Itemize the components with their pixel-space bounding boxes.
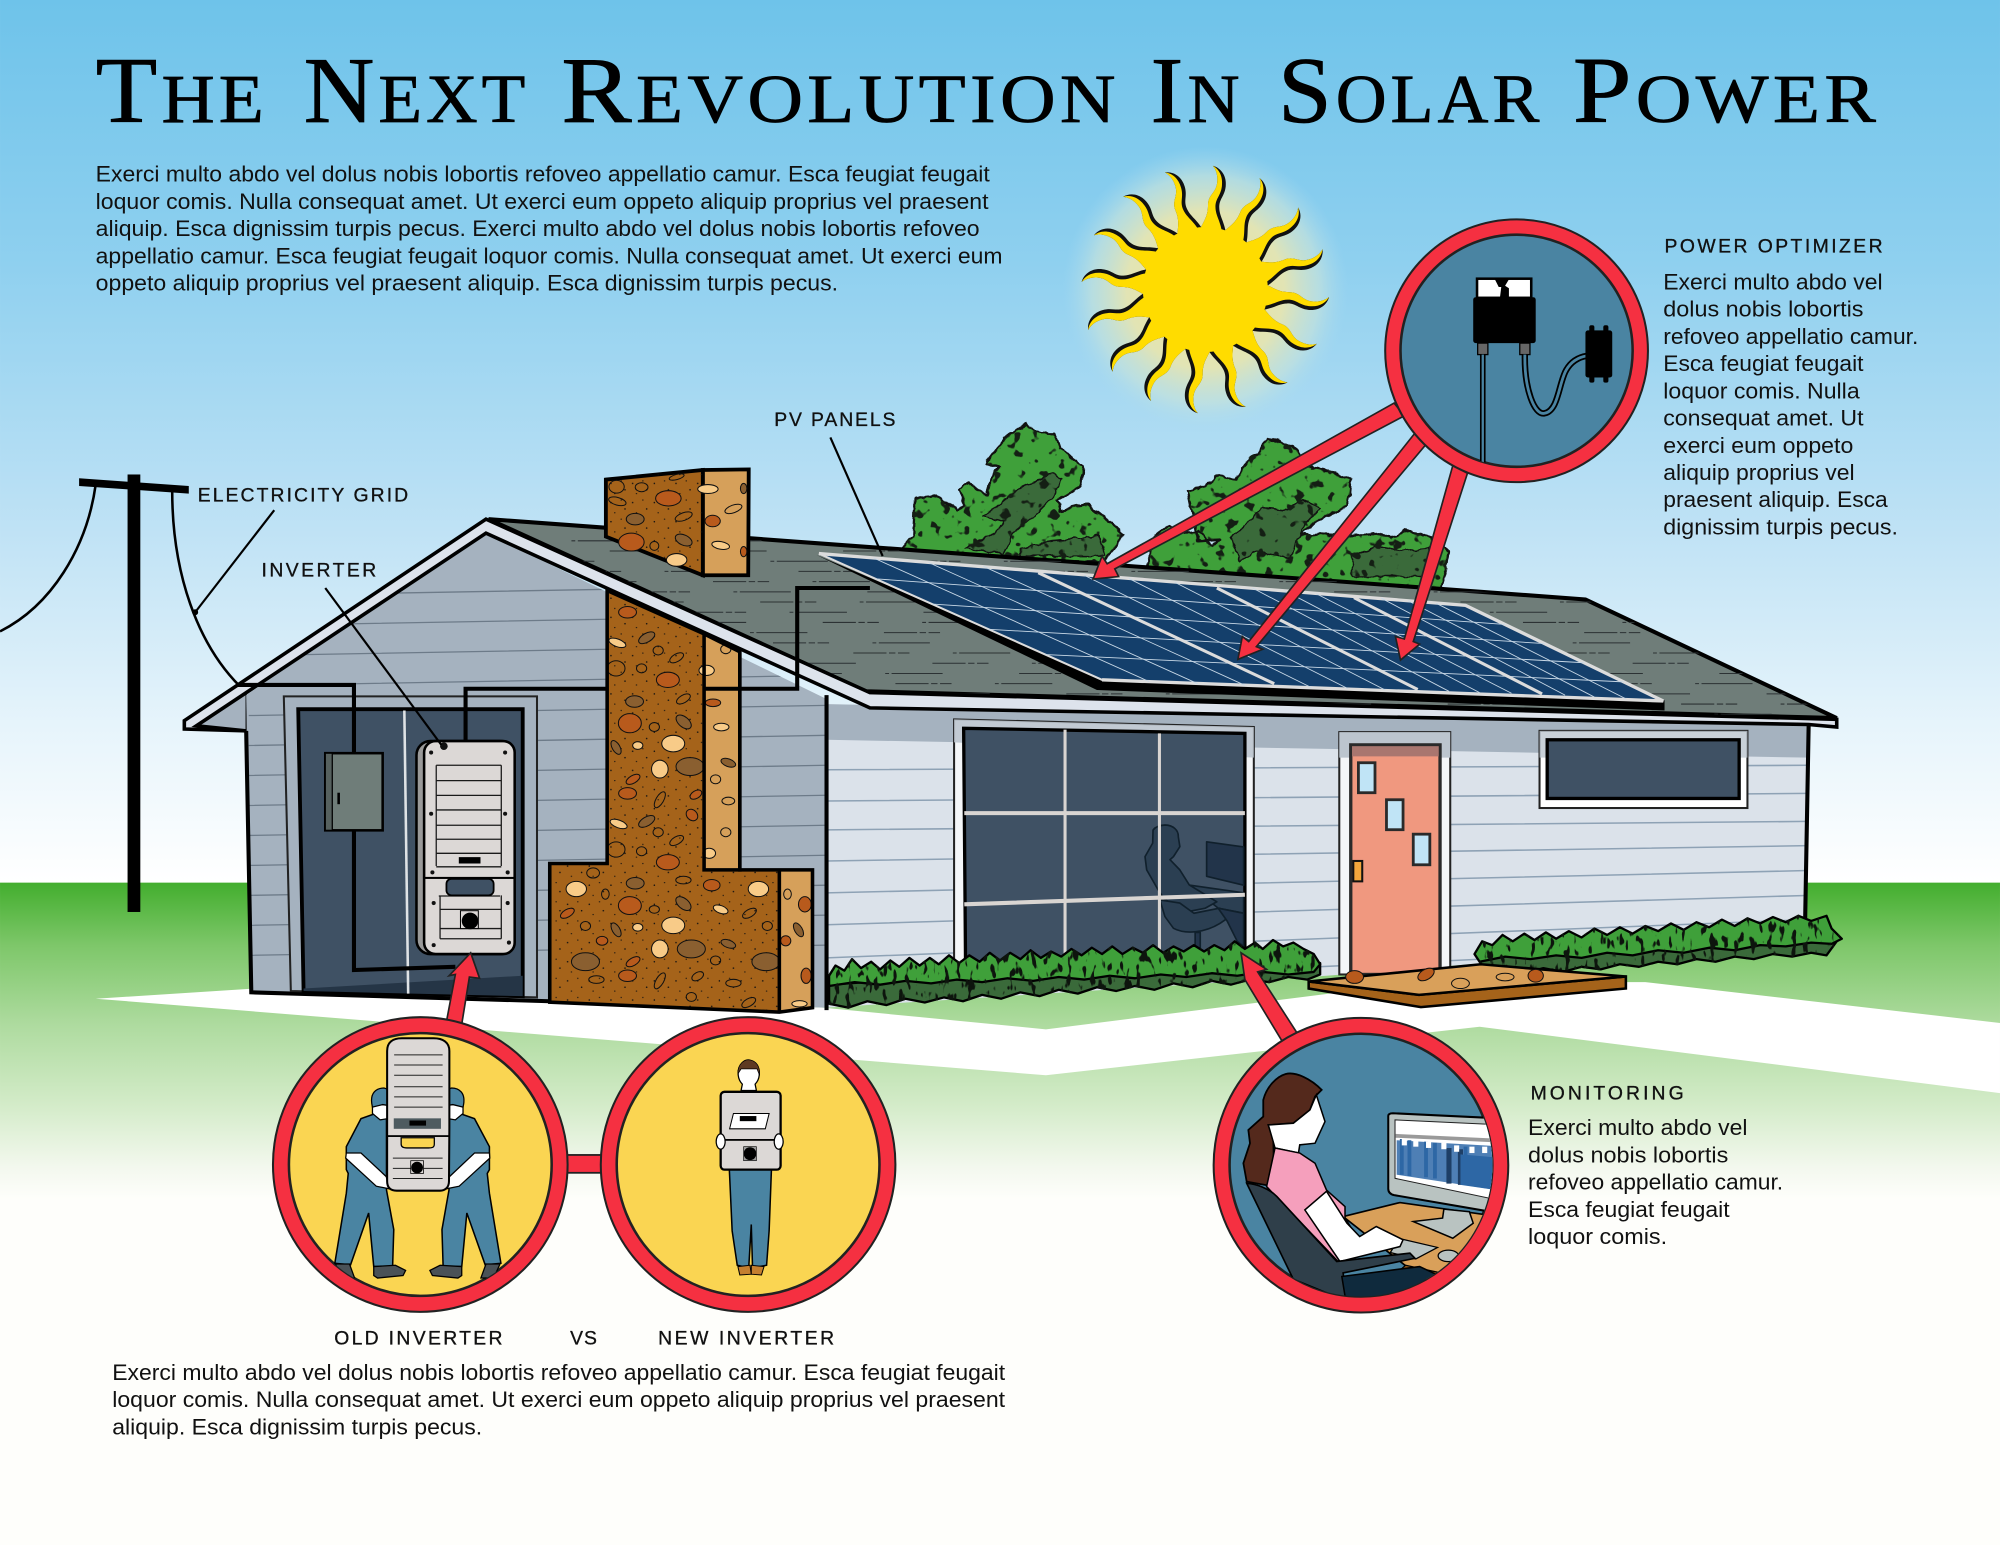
right worker — [430, 1088, 501, 1278]
old inverter unit — [387, 1038, 449, 1191]
chimney top stack — [606, 469, 749, 575]
power optimizer text: Esca feugiat feugait — [1663, 351, 1864, 376]
power optimizer text: dolus nobis lobortis — [1663, 297, 1864, 322]
stone chimney — [550, 591, 814, 1014]
labels: INVERTER — [261, 560, 376, 582]
power optimizer text: praesent aliquip. Esca — [1663, 487, 1889, 512]
door lights — [1358, 763, 1430, 865]
front bushes — [829, 916, 1842, 1008]
inverter on wall — [416, 741, 515, 954]
walkway — [96, 982, 2000, 1093]
inverter comparison labels: OLD INVERTER — [334, 1327, 503, 1349]
arrow to monitoring window — [1241, 953, 1297, 1041]
left worker — [335, 1088, 406, 1278]
monitoring text: Exerci multo abdo vel — [1528, 1115, 1747, 1140]
conduit wiring — [237, 588, 870, 970]
power optimizer text — [1663, 236, 1918, 539]
intro text block: appellatio camur. Esca feugiat feugait loquor comis. Nulla consequat amet. Ut exerci eum — [96, 243, 1003, 268]
callout circle: power optimizer — [1385, 219, 1648, 482]
chimney side stones — [699, 645, 811, 1007]
silhouette: person at computer — [1145, 825, 1244, 955]
title: POWER — [1573, 39, 1880, 143]
labels: PV PANELS — [774, 409, 895, 431]
callout circle: new inverter — [601, 1017, 895, 1312]
callout circle: old inverter — [273, 1017, 568, 1312]
intro text block — [96, 162, 1003, 295]
connector between inverter circles — [561, 1155, 607, 1173]
power optimizer text: loquor comis. Nulla — [1663, 378, 1861, 403]
arrow to wall inverter — [446, 953, 480, 1024]
intro text block: loquor comis. Nulla consequat amet. Ut exerci eum oppeto aliquip proprius vel praesent — [96, 189, 989, 214]
labels — [198, 409, 895, 582]
title: REVOLUTION — [561, 39, 1120, 143]
intro text block: aliquip. Esca dignissim turpis pecus. Exerci multo abdo vel dolus nobis lobortis refoveo — [96, 216, 980, 241]
keyboard and mouse — [1390, 1238, 1437, 1259]
trees behind house — [900, 424, 1449, 589]
callout circle: monitoring — [1214, 1018, 1508, 1312]
monitoring text: dolus nobis lobortis — [1528, 1142, 1728, 1167]
sky background — [0, 0, 2000, 883]
inverter comparison labels: NEW INVERTER — [658, 1327, 834, 1349]
monitoring text — [1528, 1082, 1783, 1249]
mudroom door with electric box — [284, 696, 537, 997]
utility pole and wires — [0, 474, 240, 912]
power optimizer text: aliquip proprius vel — [1663, 460, 1855, 485]
gable wall with siding — [196, 533, 827, 1011]
monitoring text: MONITORING — [1531, 1082, 1684, 1104]
big window with person silhouette — [954, 719, 1254, 972]
electric box — [325, 753, 383, 830]
solar panel array — [816, 554, 1665, 710]
arrows from power optimizer to panels — [1093, 403, 1467, 660]
main house wall — [827, 695, 1809, 1010]
power optimizer text: exerci eum oppeto — [1663, 433, 1853, 458]
power optimizer text: Exerci multo abdo vel — [1663, 270, 1883, 295]
title: NEXT — [304, 39, 529, 143]
front door — [1339, 732, 1450, 974]
monitoring text: Esca feugiat feugait — [1528, 1197, 1730, 1222]
inverter comparison text — [112, 1360, 1005, 1439]
intro text block: Exerci multo abdo vel dolus nobis lobortis refoveo appellatio camur. Esca feugiat feugait — [96, 162, 990, 187]
labels: ELECTRICITY GRID — [198, 484, 408, 506]
roof fascia — [184, 519, 1837, 731]
power optimizer text: consequat amet. Ut — [1663, 406, 1864, 431]
sun — [1062, 147, 1348, 432]
doorstep mat — [1309, 964, 1626, 1007]
desk — [1346, 1202, 1483, 1273]
inverter comparison labels: VS — [570, 1327, 597, 1349]
leader lines — [193, 437, 883, 745]
power optimizer text: dignissim turpis pecus. — [1663, 514, 1898, 539]
woman — [1243, 1073, 1403, 1261]
monitoring text: loquor comis. — [1528, 1224, 1667, 1249]
power optimizer text: POWER OPTIMIZER — [1665, 236, 1883, 258]
right window — [1540, 731, 1747, 808]
inverter comparison text: loquor comis. Nulla consequat amet. Ut exerci eum oppeto aliquip proprius vel praesent — [112, 1387, 1005, 1412]
inverter comparison labels — [334, 1327, 834, 1349]
title: IN — [1151, 39, 1244, 143]
chair — [1247, 1183, 1415, 1301]
title — [96, 39, 1880, 143]
monitor — [1388, 1113, 1505, 1238]
inverter comparison text: Exerci multo abdo vel dolus nobis lobortis refoveo appellatio camur. Esca feugiat feugait — [112, 1360, 1005, 1385]
monitoring text: refoveo appellatio camur. — [1528, 1170, 1783, 1195]
lawn — [0, 883, 2000, 1545]
main roof — [485, 519, 1849, 718]
title: SOLAR — [1278, 39, 1543, 143]
power optimizer text: refoveo appellatio camur. — [1663, 324, 1918, 349]
intro text block: oppeto aliquip proprius vel praesent aliquip. Esca dignissim turpis pecus. — [96, 270, 838, 295]
title: THE — [96, 39, 268, 143]
inverter comparison text: aliquip. Esca dignissim turpis pecus. — [112, 1414, 482, 1439]
